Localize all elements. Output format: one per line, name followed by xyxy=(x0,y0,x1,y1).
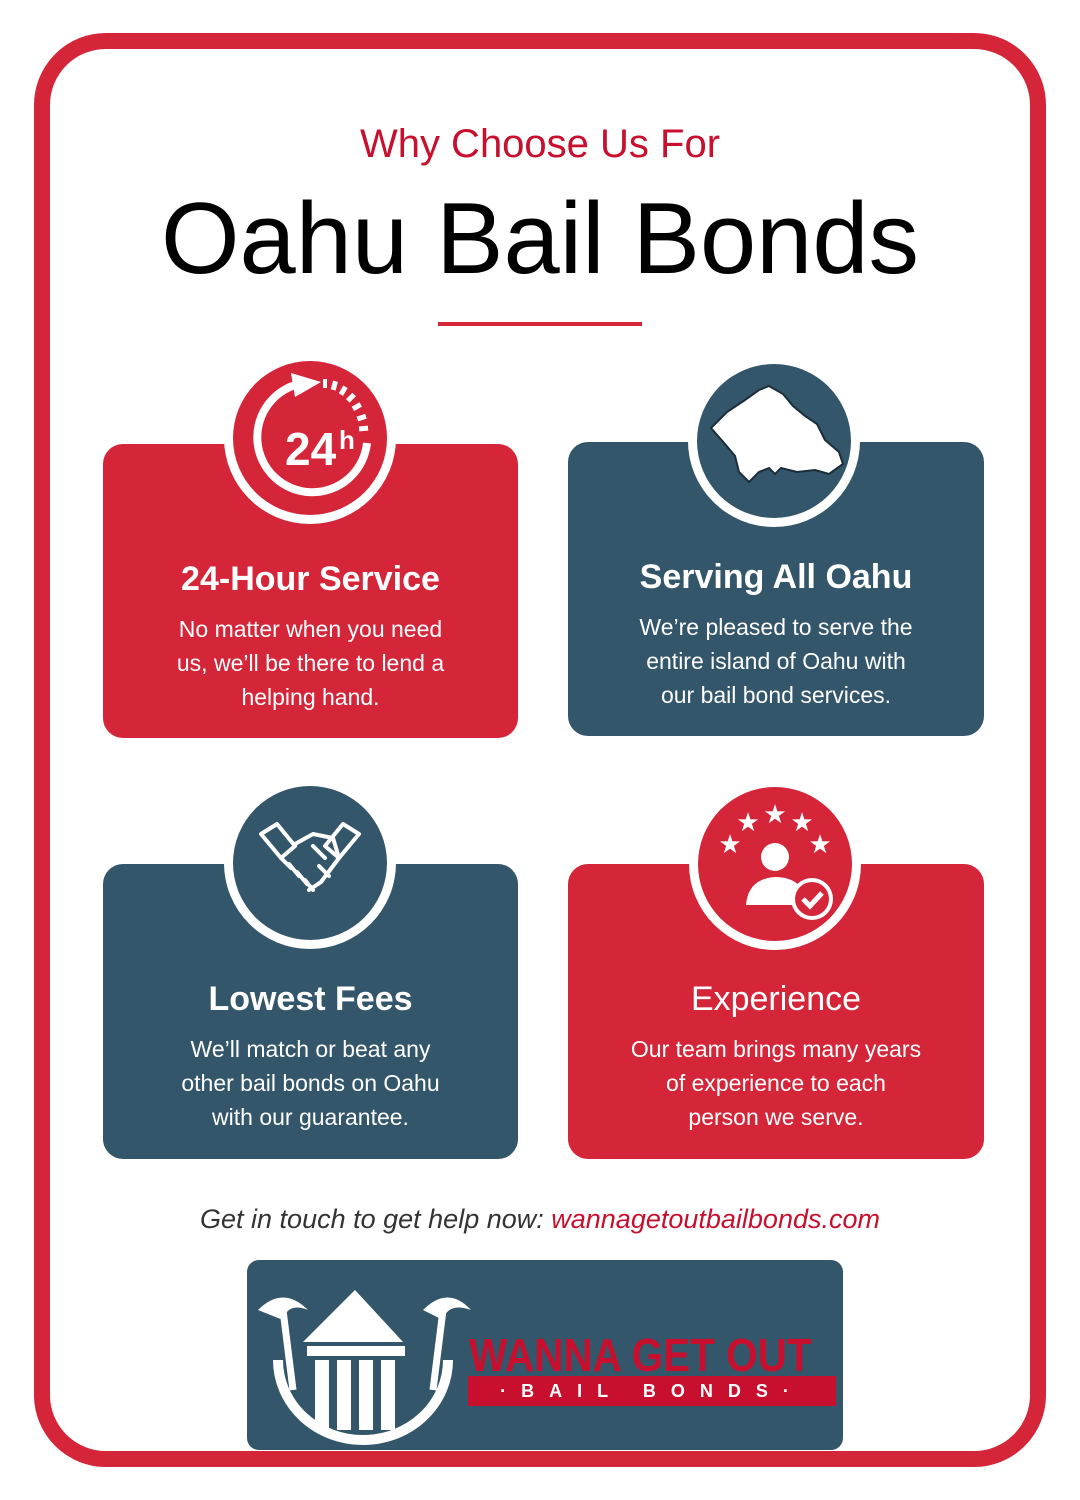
icon: stars person: ★ xyxy=(736,808,760,838)
icon: 24h: 24 xyxy=(285,423,337,475)
heading: Lowest Fees xyxy=(208,980,413,1018)
panel: lowest fees xyxy=(103,864,518,1159)
panel: experience xyxy=(568,864,984,1159)
heading: 24-Hour Service xyxy=(181,560,440,598)
text: We’ll match or beat any other bail bonds on Oahu with our guarantee. xyxy=(181,1036,440,1130)
icon: handshake xyxy=(224,777,396,949)
title underline xyxy=(438,322,642,326)
subtitle: Why Choose Us For xyxy=(360,122,720,166)
logo icon xyxy=(258,1290,471,1445)
heading: Serving All Oahu xyxy=(640,558,912,596)
logo text: WANNA GET OUT xyxy=(469,1329,812,1381)
text: We’re pleased to serve the entire island of Oahu with our bail bond services. xyxy=(639,614,913,708)
icon: oahu map xyxy=(688,355,860,527)
text: Our team brings many years of experience to each person we serve. xyxy=(631,1036,921,1130)
logo xyxy=(247,1260,843,1450)
icon: 24h: h xyxy=(339,425,355,455)
panel: serving all oahu xyxy=(568,442,984,736)
panel: 24-hour service xyxy=(103,444,518,738)
text: No matter when you need us, we’ll be there to lend a helping hand. xyxy=(177,616,444,710)
logo: ·BAIL BONDS· xyxy=(500,1381,804,1401)
icon: stars person: ★ xyxy=(808,830,832,860)
icon: stars person: ★ xyxy=(790,808,814,838)
icon: stars person xyxy=(689,778,861,950)
icon: 24h xyxy=(224,352,396,524)
title: Oahu Bail Bonds xyxy=(161,183,919,295)
contact line: Get in touch to get help now: wannagetoutbailbonds.com xyxy=(200,1204,880,1234)
heading: Experience xyxy=(691,980,861,1018)
icon: stars person: ★ xyxy=(718,830,742,860)
icon: stars person: ★ xyxy=(763,800,787,830)
